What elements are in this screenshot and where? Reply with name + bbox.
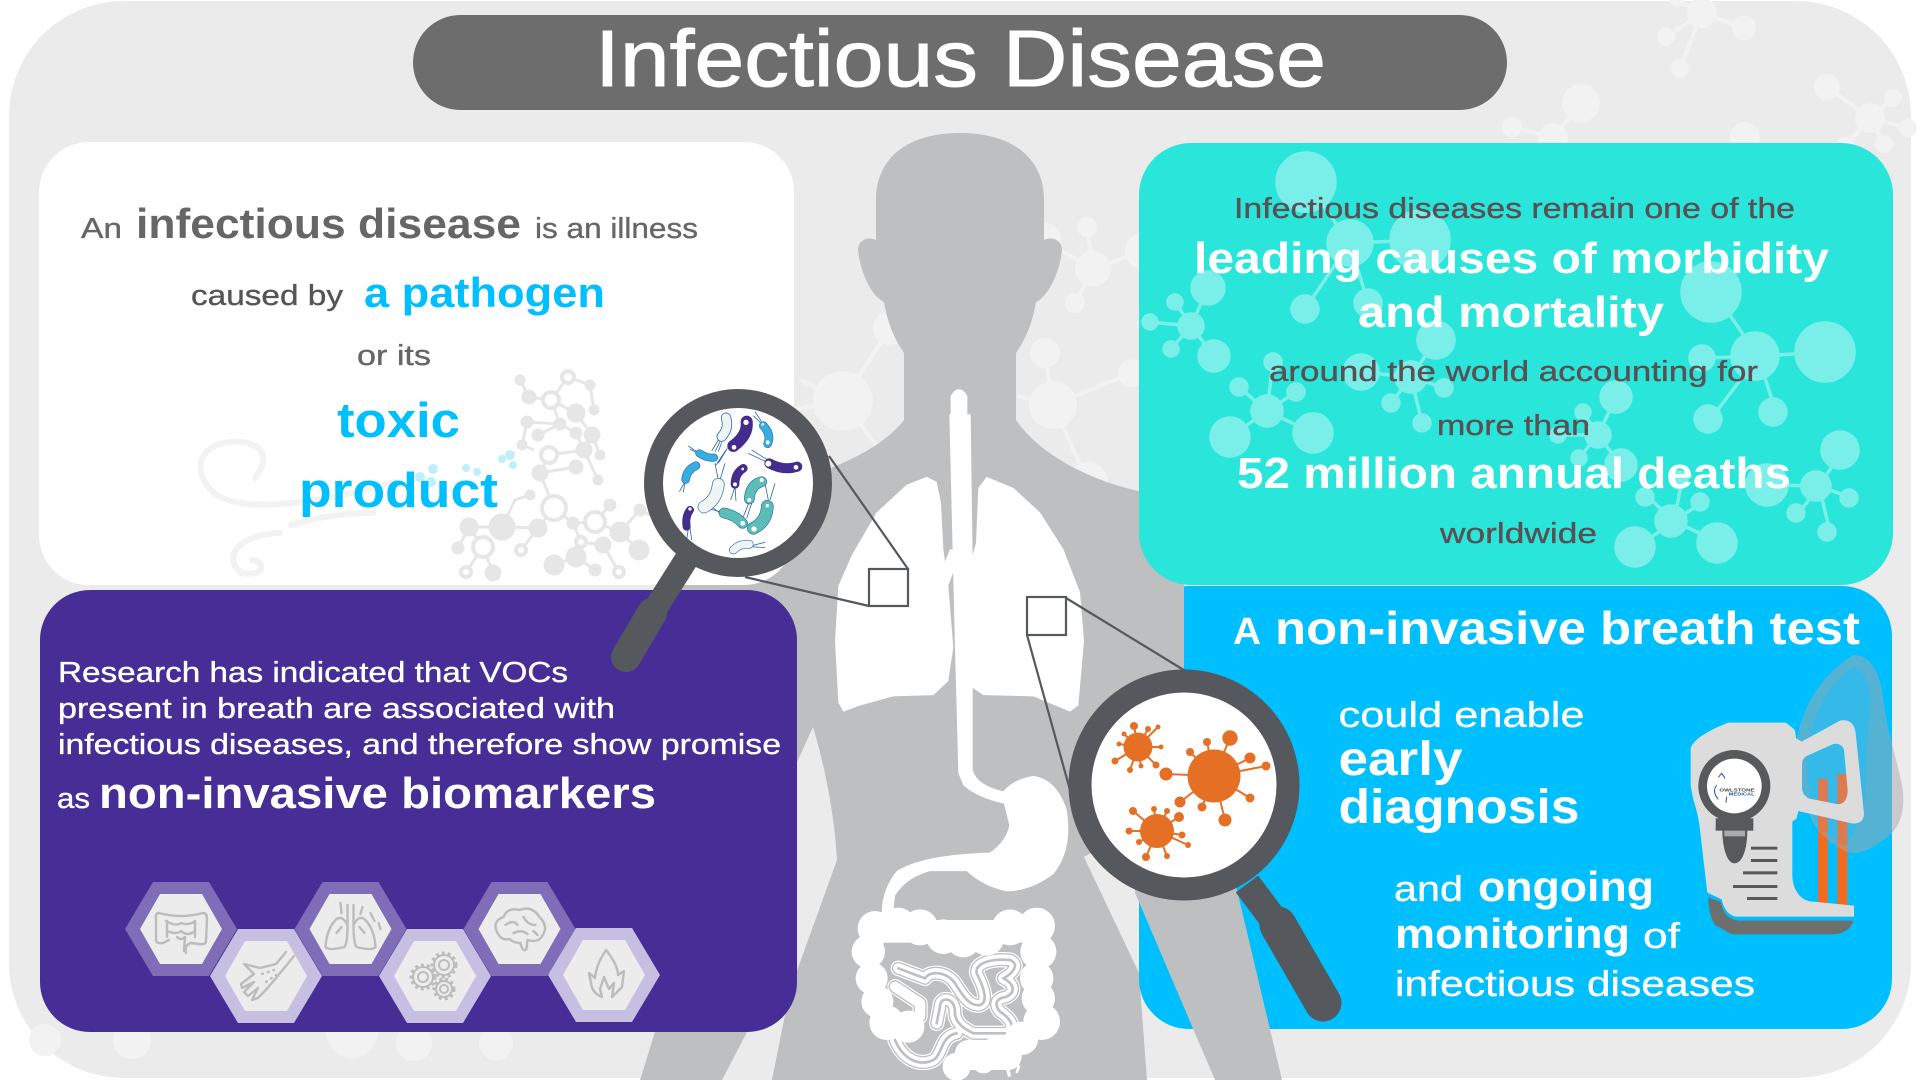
definition text: or its xyxy=(357,340,431,372)
light blue particles xyxy=(415,450,517,487)
biomarkers text: present in breath are associated with xyxy=(58,693,615,725)
icon hexagon: lungs xyxy=(294,882,406,976)
smoke swirls xyxy=(201,442,395,574)
icon: breath sampler device xyxy=(1691,655,1903,934)
breath test text: of xyxy=(1643,915,1681,956)
definition text: product xyxy=(299,464,498,518)
definition text: An xyxy=(81,213,122,245)
statistics text: around the world accounting for xyxy=(1269,356,1759,388)
definition text: caused by xyxy=(191,280,344,312)
definition text: infectious disease xyxy=(136,200,521,247)
definition text: a pathogen xyxy=(364,269,605,316)
panel: biomarkers xyxy=(40,590,797,1032)
panel: statistics xyxy=(1139,143,1893,585)
breath test text: non-invasive breath test xyxy=(1275,602,1860,654)
breath test text: and xyxy=(1394,868,1463,909)
virus particles xyxy=(1112,722,1270,861)
biomarkers text: non-invasive biomarkers xyxy=(99,769,656,818)
biomarkers text: Research has indicated that VOCs xyxy=(58,657,568,689)
definition text: is an illness xyxy=(535,213,698,245)
breath test text: monitoring xyxy=(1395,910,1630,957)
title banner: Infectious Disease xyxy=(595,14,1326,103)
right arm over breath test panel xyxy=(1135,575,1282,1080)
human body silhouette xyxy=(640,133,1184,1080)
statistics text xyxy=(1194,193,1830,550)
breath test text xyxy=(1233,602,1860,1004)
icon: breath sampler device: MEDICAL xyxy=(1729,792,1755,798)
organs: lungs, trachea, stomach xyxy=(835,389,1084,917)
grey molecule cluster xyxy=(453,371,660,580)
statistics text: leading causes of morbidity xyxy=(1194,234,1830,283)
icon hexagon: gears xyxy=(379,929,491,1023)
statistics text: 52 million annual deaths xyxy=(1237,449,1791,498)
magnifier: virus xyxy=(1080,681,1323,1003)
panel: breath test xyxy=(1139,586,1903,1029)
icon hexagon: flame xyxy=(548,928,660,1022)
bacteria xyxy=(679,412,798,550)
definition text: toxic xyxy=(337,394,460,448)
icon: breath sampler device: OWLSTONE xyxy=(1719,787,1755,793)
panel: definition xyxy=(39,142,794,585)
icon hexagon: brain xyxy=(464,882,576,976)
title banner xyxy=(413,14,1507,110)
breath test text: could enable xyxy=(1338,694,1584,735)
teal molecules xyxy=(1143,153,1858,566)
zoom callout: right lung xyxy=(1027,597,1187,790)
breath test text: diagnosis xyxy=(1338,781,1580,834)
icon hexagon: intestine xyxy=(125,882,237,976)
statistics text: Infectious diseases remain one of the xyxy=(1234,193,1795,225)
icon hexagon: skin rash xyxy=(210,929,322,1023)
zoom callout: left lung xyxy=(745,456,908,606)
statistics text: and mortality xyxy=(1358,288,1665,337)
magnifier: bacteria xyxy=(626,398,822,657)
biomarkers text xyxy=(57,657,781,818)
breath test text: infectious diseases xyxy=(1395,963,1755,1004)
statistics text: worldwide xyxy=(1439,518,1597,550)
biomarkers text: as xyxy=(57,783,90,815)
gap between left arm and torso xyxy=(722,727,837,1080)
breath test text: A xyxy=(1233,611,1261,653)
breath test text: ongoing xyxy=(1478,863,1654,910)
definition text xyxy=(81,200,698,518)
organs: intestines xyxy=(852,908,1060,1080)
statistics text: more than xyxy=(1437,410,1590,442)
biomarkers text: infectious diseases, and therefore show promise xyxy=(58,729,781,761)
breath test text: early xyxy=(1338,733,1463,786)
